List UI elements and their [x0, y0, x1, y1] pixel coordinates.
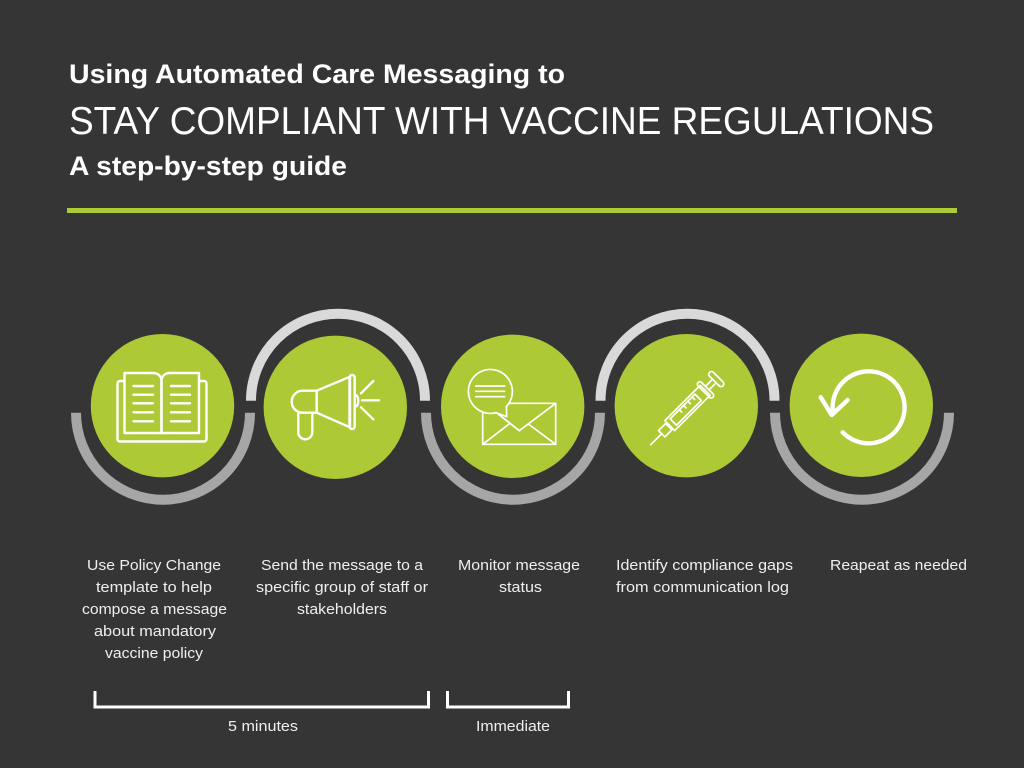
text: step 2 description: specific group of staff or — [256, 579, 428, 596]
arc: step 5 lower — [775, 413, 949, 500]
icon: open book — [118, 373, 206, 442]
green title rule — [67, 208, 957, 213]
label: 5 minutes: 5 minutes — [228, 718, 298, 735]
text: step 4 description: from communication log — [616, 579, 789, 596]
bracket: 5 minutes — [95, 691, 428, 735]
text: step 2 description — [256, 557, 428, 618]
text: step 1 description — [82, 557, 227, 662]
arc: step 3 lower — [426, 413, 600, 500]
text: step 2 description: stakeholders — [297, 601, 387, 618]
text: step 4 description — [616, 557, 793, 596]
title line 1: Using Automated Care Messaging to — [69, 59, 565, 89]
text: step 1 description: about mandatory — [94, 623, 217, 640]
icon: envelope and speech bubble — [468, 369, 556, 444]
label: immediate: Immediate — [476, 718, 550, 735]
arc: step 1 lower — [76, 413, 250, 500]
subtitle: A step-by-step guide — [69, 151, 347, 181]
step 1 circle with book icon — [91, 334, 234, 477]
step 2 circle with megaphone icon — [264, 336, 407, 479]
text: step 4 description: Identify compliance gaps — [616, 557, 793, 574]
text: step 2 description: Send the message to a — [261, 557, 424, 574]
text: step 3 description: Monitor message — [458, 557, 580, 574]
text: step 3 description — [458, 557, 580, 596]
icon: circular repeat arrow — [821, 371, 905, 443]
bracket: immediate — [448, 691, 568, 735]
step 5 circle with repeat icon — [790, 334, 933, 477]
icon: syringe — [643, 370, 726, 452]
text: step 1 description: compose a message — [82, 601, 227, 618]
text: step 1 description: template to help — [96, 579, 212, 596]
icon: megaphone — [292, 375, 379, 439]
text: step 1 description: Use Policy Change — [87, 557, 221, 574]
arc: step 4 upper — [600, 314, 774, 401]
text: step 5 description: Reapeat as needed — [830, 557, 967, 574]
arc: step 2 upper — [251, 314, 425, 401]
step 3 circle with envelope icon — [441, 335, 584, 478]
title line 2: STAY COMPLIANT WITH VACCINE REGULATIONS — [69, 100, 934, 143]
text: step 3 description: status — [499, 579, 542, 596]
heading: title block — [69, 59, 934, 181]
text: step 1 description: vaccine policy — [105, 645, 204, 662]
step 4 circle with syringe icon — [615, 334, 758, 477]
